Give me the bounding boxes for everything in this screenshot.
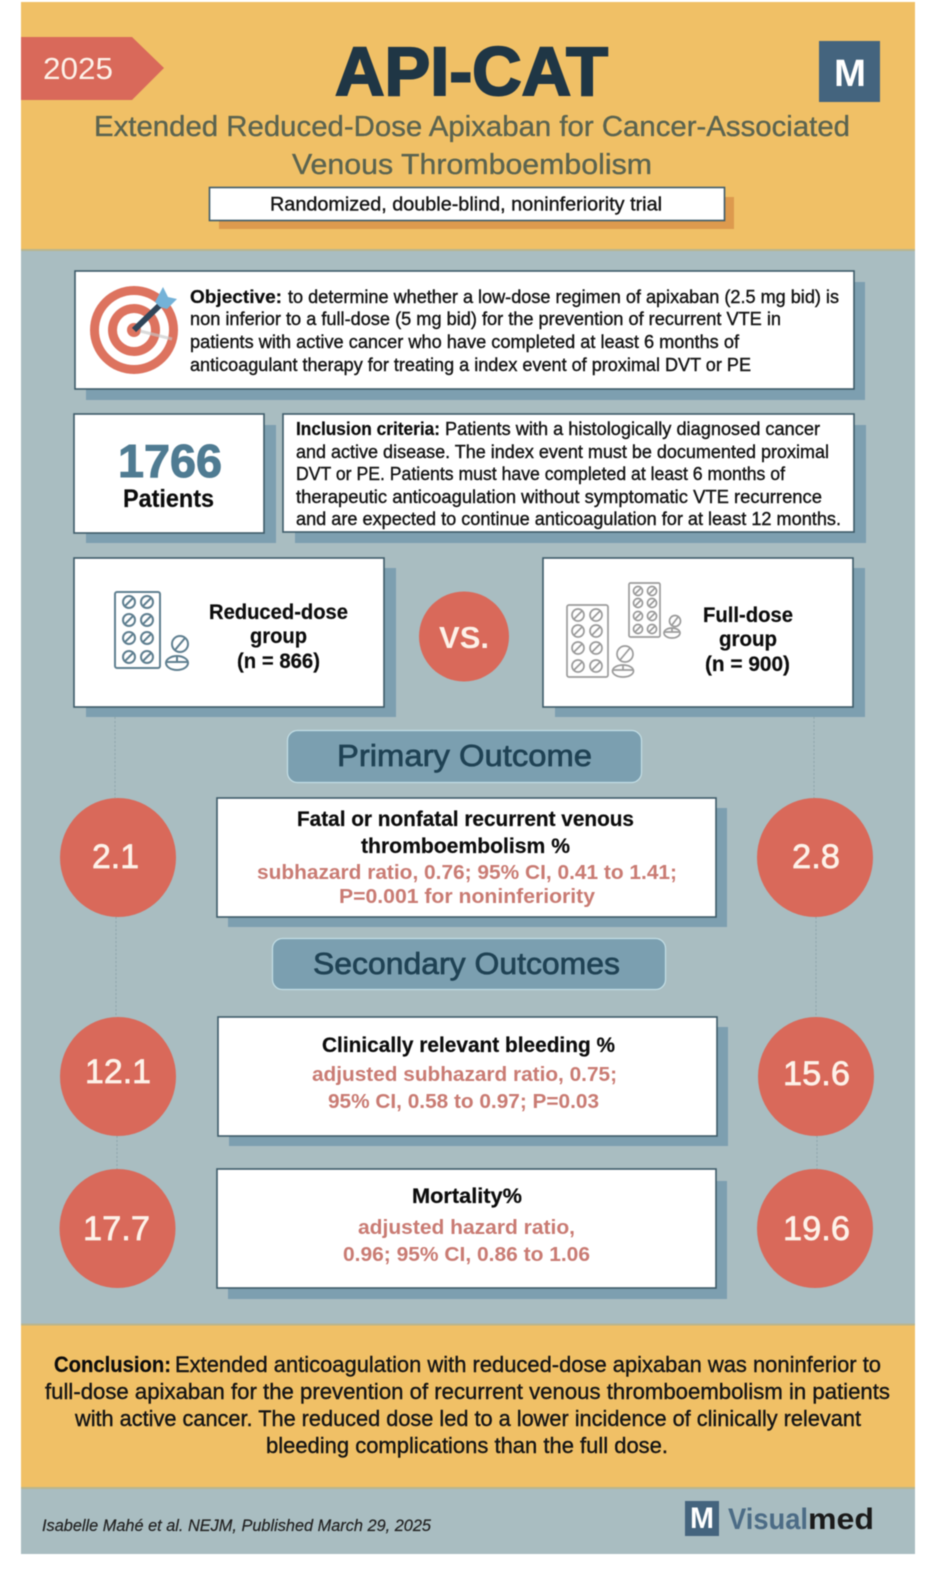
year tag — [21, 37, 164, 100]
group label — [209, 601, 348, 673]
heading: primary outcome — [288, 730, 642, 782]
value: full-dose primary outcome: 2.8 — [792, 838, 840, 876]
group label: Reduced-dose — [209, 601, 348, 624]
value: reduced-dose bleeding: 12.1 — [85, 1053, 151, 1091]
panel: inclusion criteria — [283, 414, 866, 543]
logo: Visualmed: med — [808, 1503, 874, 1536]
panel: mortality: 0.96; 95% CI, 0.86 to 1.06 — [343, 1244, 590, 1266]
versus badge — [419, 592, 509, 682]
year tag: 2025 — [43, 51, 113, 86]
group label: Full-dose — [703, 604, 793, 627]
patients label: Patients — [123, 485, 214, 513]
conclusion text: full-dose apixaban for the prevention of recurrent venous thromboembolism in patients — [45, 1379, 890, 1404]
panel: mortality — [217, 1169, 727, 1299]
objective text: patients with active cancer who have completed at least 6 months of — [190, 332, 740, 352]
value: reduced-dose primary outcome: 2.1 — [92, 838, 139, 876]
icon: target with dart — [90, 286, 178, 374]
subtitle: Venous Thromboembolism — [292, 149, 652, 181]
group label: (n = 866) — [237, 650, 320, 673]
group label — [703, 604, 793, 676]
panel: conclusion — [21, 1324, 915, 1489]
group label: group — [250, 625, 307, 648]
number of patients: 1766 — [118, 435, 222, 487]
title: API-CAT — [335, 33, 608, 110]
panel: mortality: adjusted hazard ratio, — [358, 1217, 575, 1239]
panel: primary outcome result: Fatal or nonfatal recurrent venous — [297, 808, 634, 831]
panel: objective — [75, 271, 865, 400]
subtitle — [94, 111, 850, 181]
value: full-dose bleeding — [758, 1017, 874, 1136]
icon: two blister packs and pills — [567, 583, 680, 677]
logo: Visualmed: Visual — [728, 1503, 808, 1536]
panel: patient count — [74, 414, 276, 543]
value: full-dose mortality — [757, 1169, 873, 1288]
panel: clinically relevant bleeding: adjusted subhazard ratio, 0.75; — [312, 1064, 617, 1086]
panel: primary outcome result — [217, 798, 727, 927]
conclusion text: bleeding complications than the full dose. — [266, 1433, 668, 1458]
conclusion text — [45, 1352, 890, 1458]
versus badge: VS. — [439, 620, 489, 655]
objective text: to determine whether a low-dose regimen of apixaban (2.5 mg bid) is — [288, 287, 839, 307]
inclusion criteria text: Inclusion criteria: — [296, 419, 440, 439]
conclusion text: Conclusion: — [54, 1352, 171, 1377]
value: reduced-dose mortality: 17.7 — [83, 1210, 150, 1248]
value: reduced-dose primary outcome — [60, 798, 176, 917]
conclusion text: Extended anticoagulation with reduced-dose apixaban was noninferior to — [175, 1352, 881, 1377]
inclusion criteria text: DVT or PE. Patients must have completed at least 6 months of — [296, 464, 786, 484]
heading: secondary outcomes — [272, 938, 666, 990]
value: full-dose bleeding: 15.6 — [783, 1055, 850, 1093]
heading: secondary outcomes: Secondary Outcomes — [313, 946, 620, 981]
subtitle: Extended Reduced-Dose Apixaban for Cancer-Associated — [94, 111, 850, 143]
objective text: anticoagulant therapy for treating a index event of proximal DVT or PE — [190, 355, 751, 375]
logo: M badge: M — [834, 53, 866, 95]
value: full-dose mortality: 19.6 — [783, 1210, 850, 1248]
logo: Visualmed — [685, 1501, 874, 1536]
objective text: Objective: — [190, 287, 282, 307]
citation: Isabelle Mahé et al. NEJM, Published March 29, 2025 — [42, 1516, 432, 1535]
study design badge: Randomized, double-blind, noninferiority trial — [270, 194, 662, 216]
value: reduced-dose bleeding — [60, 1017, 176, 1136]
panel: primary outcome result: subhazard ratio, 0.76; 95% CI, 0.41 to 1.41; — [257, 862, 677, 884]
inclusion criteria text: and are expected to continue anticoagulation for at least 12 months. — [296, 509, 841, 529]
objective text: non inferior to a full-dose (5 mg bid) for the prevention of recurrent VTE in — [190, 309, 781, 329]
group label: (n = 900) — [705, 653, 790, 676]
heading: primary outcome: Primary Outcome — [337, 738, 592, 773]
panel: clinically relevant bleeding — [218, 1017, 728, 1146]
value: reduced-dose mortality — [60, 1169, 176, 1288]
panel: clinically relevant bleeding: 95% CI, 0.58 to 0.97; P=0.03 — [328, 1091, 599, 1113]
inclusion criteria text: and active disease. The index event must be documented proximal — [296, 442, 829, 462]
panel: primary outcome result: P=0.001 for noninferiority — [339, 886, 596, 908]
logo: M badge — [819, 41, 880, 102]
group label: group — [719, 628, 777, 651]
value: full-dose primary outcome — [757, 798, 873, 917]
icon: blister pack and pills — [115, 592, 188, 670]
panel: full-dose group — [543, 558, 865, 717]
panel: primary outcome result: thromboembolism % — [361, 835, 570, 858]
study design badge — [210, 188, 734, 229]
connector lines between result circles — [115, 717, 817, 1169]
objective text — [190, 287, 839, 375]
panel: clinically relevant bleeding: Clinically relevant bleeding % — [322, 1034, 615, 1057]
conclusion text: with active cancer. The reduced dose led to a lower incidence of clinically relevant — [74, 1406, 861, 1431]
panel: reduced-dose group — [74, 558, 396, 717]
inclusion criteria text — [296, 419, 841, 529]
logo: Visualmed: M — [690, 1502, 714, 1535]
inclusion criteria text: therapeutic anticoagulation without symptomatic VTE recurrence — [296, 487, 822, 507]
panel: mortality: Mortality% — [412, 1185, 522, 1208]
inclusion criteria text: Patients with a histologically diagnosed cancer — [445, 419, 820, 439]
header panel — [21, 2, 915, 251]
